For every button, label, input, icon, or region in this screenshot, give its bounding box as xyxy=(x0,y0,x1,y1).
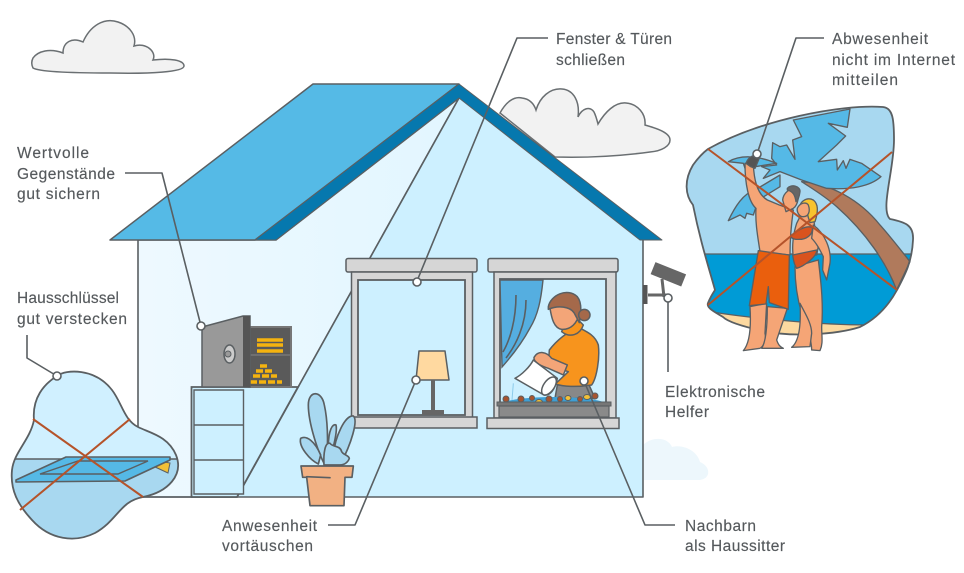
man xyxy=(743,155,800,351)
woman watering plants xyxy=(512,292,599,410)
callout: valuables: Gegenstände xyxy=(17,166,115,183)
cloud: pale lower right xyxy=(643,439,708,480)
callout: windows and doors xyxy=(413,31,672,286)
callout: valuables: gut sichern xyxy=(17,186,100,203)
blob outline xyxy=(687,107,913,334)
potted plant xyxy=(300,394,355,506)
callout: neighbours: Nachbarn xyxy=(685,518,756,535)
callout: house key: Hausschlüssel xyxy=(17,290,119,307)
callout: absence online xyxy=(753,31,956,158)
callout: fake presence xyxy=(222,376,420,555)
callout: house key: gut verstecken xyxy=(17,311,127,328)
wall outline xyxy=(138,98,643,497)
callout: electronic helpers: Elektronische xyxy=(665,384,765,401)
callout: electronic helpers xyxy=(664,294,765,421)
callout: absence online: Abwesenheit xyxy=(832,31,929,48)
window right sill xyxy=(487,418,619,428)
woman xyxy=(791,199,830,351)
window right xyxy=(487,258,619,428)
callout: windows and doors: Fenster & Türen xyxy=(556,31,672,48)
callout: windows and doors: schließen xyxy=(556,52,625,69)
cloud: behind roof xyxy=(500,89,670,157)
curtain xyxy=(500,280,543,367)
couple taking a selfie xyxy=(743,155,830,351)
house xyxy=(110,84,662,497)
callout: valuables xyxy=(17,145,205,330)
callout: valuables: Wertvolle xyxy=(17,145,89,162)
callout: electronic helpers: Helfer xyxy=(665,404,709,421)
cabinet xyxy=(192,387,298,497)
cloud: top left xyxy=(32,21,184,73)
cross xyxy=(20,419,143,510)
callout: absence online: nicht im Internet xyxy=(832,52,956,69)
cross xyxy=(708,149,897,305)
wall: right side xyxy=(237,98,643,497)
wall: lit left side xyxy=(138,98,459,497)
flower box xyxy=(497,393,611,417)
callout: neighbours: als Haussitter xyxy=(685,538,785,555)
roof: dark gable edge xyxy=(255,84,662,240)
panel: hidden key blob xyxy=(10,370,180,540)
roof: front slope xyxy=(110,84,459,240)
palm tree xyxy=(728,109,910,290)
lamp xyxy=(416,351,449,415)
safe with gold xyxy=(202,316,291,387)
icon: doormat xyxy=(16,457,170,482)
callout: fake presence: vortäuschen xyxy=(222,538,313,555)
callout: fake presence: Anwesenheit xyxy=(222,518,318,535)
window left xyxy=(346,258,477,428)
callout: house key xyxy=(17,290,127,380)
callout: neighbours xyxy=(580,377,785,555)
security camera xyxy=(643,262,686,304)
callout: absence online: mitteilen xyxy=(832,72,898,89)
panel: holiday photo blob xyxy=(680,100,920,351)
